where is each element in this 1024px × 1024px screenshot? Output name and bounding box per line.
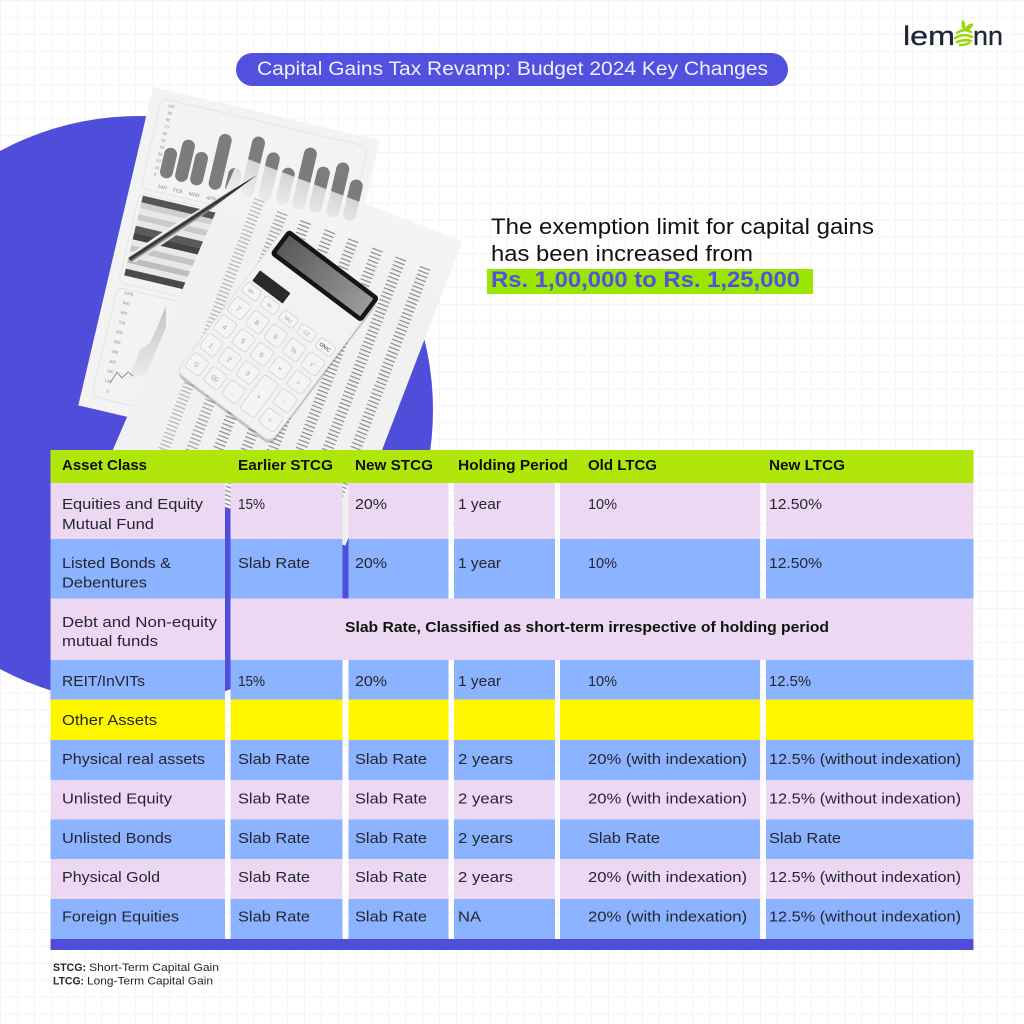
calculator display: [270, 229, 380, 323]
bar chart axis labels: 0: [154, 172, 158, 177]
row: unlisted equity: Unlisted Equity: [62, 790, 173, 808]
footnote: abbreviations: Long-Term Capital Gain: [87, 976, 213, 988]
row: REIT: 12.5%: [769, 673, 811, 690]
line chart axis labels: 100: [104, 378, 113, 384]
bar chart axis labels: 40: [159, 144, 165, 150]
table header: Asset Class: [62, 457, 147, 474]
row: foreign equities: NA: [458, 908, 481, 926]
calculator keys: ×: [276, 365, 283, 373]
callout: exemption limit: has been increased from: [491, 241, 753, 266]
calculator keys: 5: [239, 338, 246, 346]
row: listed bonds: [50, 539, 974, 598]
calculator keys: ON/C: [318, 342, 332, 354]
bar chart: MAR: [188, 191, 200, 199]
title pill: Capital Gains Tax Revamp: Budget 2024 Key Changes: [257, 59, 768, 80]
footnote: abbreviations: LTCG:: [53, 976, 84, 988]
footnote: abbreviations: [53, 962, 219, 988]
row: REIT: 20%: [355, 673, 387, 690]
callout: exemption limit: [487, 214, 874, 294]
row: listed bonds: 20%: [355, 555, 387, 572]
line chart axis labels: 1000: [124, 290, 134, 297]
bar chart axis labels: 90: [167, 110, 173, 116]
bar chart axis labels: 80: [165, 117, 172, 123]
calculator keys: 9: [271, 333, 279, 341]
row: equities: [50, 483, 974, 539]
table header: Holding Period: [458, 457, 568, 474]
logo: lemonn: nn: [973, 21, 1003, 51]
calculator keys: .: [230, 390, 236, 396]
table header: New LTCG: [769, 457, 845, 474]
row: listed bonds: Slab Rate: [238, 555, 310, 572]
line chart area: [110, 306, 166, 383]
line chart axis labels: 400: [111, 349, 119, 355]
calculator keys: 1: [207, 342, 214, 350]
bar chart axis labels: 70: [164, 124, 170, 130]
row: physical real assets: Slab Rate: [355, 751, 427, 768]
row: listed bonds: 12.50%: [769, 555, 822, 572]
line chart axis labels: 900: [122, 300, 131, 306]
calculator keys: 2: [225, 356, 233, 364]
calculator keys: √: [308, 360, 316, 369]
row: equities: 12.50%: [769, 496, 822, 513]
calculator: [175, 227, 381, 446]
table footer bar: [50, 939, 974, 950]
calculator keys: 3: [244, 370, 251, 378]
logo: lemonn: lem: [903, 21, 955, 51]
row: unlisted bonds: Slab Rate: [588, 830, 660, 847]
row: equities: 1 year: [458, 496, 501, 513]
row: unlisted equity: [50, 780, 974, 820]
row: REIT: 10%: [588, 673, 617, 690]
row: REIT: 15%: [238, 673, 265, 690]
document with bar chart, table and line chart: [78, 87, 380, 459]
row: physical gold: 20% (with indexation): [588, 869, 747, 886]
row: equities: Mutual Fund: [62, 516, 154, 533]
bar chart axis labels: 60: [162, 131, 168, 137]
bar chart: JAN: [157, 184, 168, 192]
row: foreign equities: Foreign Equities: [62, 908, 179, 926]
row: physical gold: Slab Rate: [238, 869, 310, 886]
row: debt funds: mutual funds: [62, 633, 158, 650]
line chart axis labels: 300: [109, 358, 117, 365]
bar chart: [156, 115, 369, 235]
row: unlisted bonds: Unlisted Bonds: [62, 830, 172, 847]
calculator keys: %: [289, 346, 298, 356]
line chart axis labels: 0: [106, 388, 110, 394]
row: physical real assets: 2 years: [458, 751, 513, 768]
row: unlisted equity: Slab Rate: [355, 790, 427, 808]
row: REIT: [50, 660, 974, 700]
calculator keys: MU: [283, 315, 293, 325]
calculator keys: M-: [265, 302, 274, 311]
footnote: abbreviations: Short-Term Capital Gain: [89, 962, 219, 974]
row: REIT: 1 year: [458, 673, 501, 690]
bar chart: FEB: [172, 187, 184, 196]
row: physical gold: 2 years: [458, 869, 513, 886]
row: other assets: Other Assets: [62, 712, 157, 729]
row: debt funds: [50, 598, 974, 660]
row: foreign equities: 12.5% (without indexation): [769, 908, 961, 926]
row: unlisted equity: Slab Rate: [238, 790, 310, 808]
row: physical real assets: 12.5% (without indexation): [769, 751, 961, 768]
line chart axis labels: 200: [106, 368, 115, 375]
row: equities: Equities and Equity: [62, 496, 204, 513]
row: equities: 15%: [238, 496, 265, 513]
callout: exemption limit: The exemption limit for capital gains: [491, 214, 874, 239]
table header: [50, 450, 974, 483]
row: physical real assets: Physical real assets: [62, 751, 205, 768]
bar chart axis labels: 30: [157, 151, 164, 157]
mini data table: [124, 196, 231, 296]
row: physical real assets: Slab Rate: [238, 751, 310, 768]
row: foreign equities: Slab Rate: [355, 908, 427, 926]
calculator keys: 7: [234, 306, 242, 314]
bar chart axis labels: 10: [154, 165, 160, 171]
second document with number columns: [105, 151, 462, 559]
row: foreign equities: 20% (with indexation): [588, 908, 747, 926]
photo: documents, pen and calculator: [78, 87, 462, 559]
line chart axis labels: 700: [118, 319, 126, 326]
line chart axis labels: 500: [113, 339, 122, 345]
row: unlisted equity: 12.5% (without indexation): [769, 790, 961, 808]
line chart axis labels: [101, 290, 134, 394]
calculator keys: [184, 281, 337, 433]
row: physical real assets: [50, 740, 974, 780]
row: unlisted equity: 2 years: [458, 790, 513, 808]
calculator keys: CE: [302, 329, 311, 339]
row: physical gold: [50, 859, 974, 899]
row: other assets: [50, 700, 974, 740]
row: listed bonds: 1 year: [458, 555, 501, 572]
row: unlisted bonds: Slab Rate: [238, 830, 310, 847]
row: foreign equities: [50, 899, 974, 939]
calculator keys: 6: [257, 352, 265, 360]
row: REIT: REIT/InVITs: [62, 673, 145, 690]
calculator keys: ÷: [294, 379, 302, 387]
blue background circle: [0, 116, 433, 704]
calculator keys: 4: [221, 324, 228, 332]
line chart axis labels: 800: [120, 310, 129, 316]
calculator keys: 00: [209, 374, 220, 384]
bar chart axis labels: 50: [161, 137, 167, 143]
bar chart axis labels: 100: [168, 103, 176, 110]
calculator keys: -: [281, 398, 287, 405]
row: listed bonds: 10%: [588, 555, 617, 572]
row: foreign equities: Slab Rate: [238, 908, 310, 926]
bar chart: APR: [205, 195, 217, 203]
logo: lemonn: [903, 20, 1003, 51]
row: equities: 20%: [355, 496, 387, 513]
calculator keys: 0: [192, 361, 200, 369]
row: physical gold: 12.5% (without indexation): [769, 869, 961, 886]
row: equities: 10%: [588, 496, 617, 513]
table header: New STCG: [355, 457, 433, 474]
pen: [128, 175, 257, 262]
row: physical gold: Physical Gold: [62, 869, 160, 886]
calculator keys: =: [266, 417, 273, 425]
row: debt funds: Debt and Non-equity: [62, 614, 218, 631]
bar chart axis labels: [152, 103, 176, 178]
title pill: [236, 53, 788, 86]
row: unlisted bonds: Slab Rate: [769, 830, 841, 847]
row: physical real assets: 20% (with indexation): [588, 751, 747, 768]
line chart axis labels: 600: [116, 329, 124, 336]
number columns: [153, 200, 427, 542]
calculator keys: 8: [253, 319, 260, 327]
row: listed bonds: Listed Bonds &: [62, 555, 171, 572]
icon: green lemon with leaves: [955, 20, 973, 45]
row: unlisted bonds: [50, 820, 974, 859]
row: unlisted bonds: Slab Rate: [355, 830, 427, 847]
calculator keys: M+: [246, 288, 256, 297]
footnote: abbreviations: STCG:: [53, 962, 86, 974]
highlighted amount: Rs. 1,00,000 to Rs. 1,25,000: [491, 267, 800, 292]
second document base sheet: [105, 156, 462, 545]
table header: Old LTCG: [588, 457, 657, 474]
row: unlisted bonds: 2 years: [458, 830, 513, 847]
row: physical gold: Slab Rate: [355, 869, 427, 886]
calculator keys: +: [255, 393, 262, 401]
row: listed bonds: Debentures: [62, 574, 147, 592]
row: unlisted equity: 20% (with indexation): [588, 790, 747, 808]
bar chart axis labels: 20: [156, 158, 162, 164]
table: [50, 450, 974, 950]
solar panel: [252, 270, 290, 304]
row: debt funds: Slab Rate, Classified as short-term irrespective of holding period: [345, 619, 829, 636]
table header: Earlier STCG: [238, 457, 333, 474]
